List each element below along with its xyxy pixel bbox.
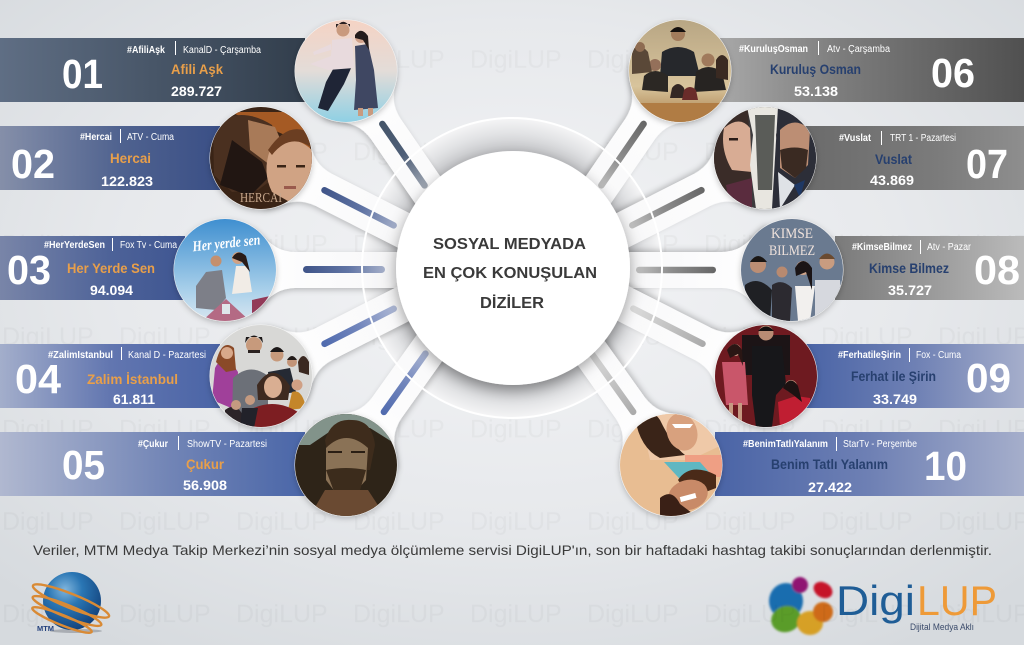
photo: Her Yerde Sen: Her yerde sen <box>191 232 261 255</box>
logo: DigiLUP: Digi <box>836 577 915 624</box>
panel: 05 Çukur: 56.908 <box>183 477 227 493</box>
title: DİZİLER <box>480 294 544 312</box>
photo: Çukur <box>294 414 398 516</box>
title: EN ÇOK KONUŞULAN <box>423 265 597 282</box>
panel: 02 Hercai: 122.823 <box>101 173 153 189</box>
panel: 06 Kuruluş Osman <box>720 38 1024 102</box>
title <box>423 236 597 312</box>
arm 10 <box>525 285 692 470</box>
panel: 06 Kuruluş Osman: 53.138 <box>794 83 838 99</box>
photo: Hercai <box>210 106 312 210</box>
panel: 09 Ferhat ile Şirin: 33.749 <box>873 391 917 407</box>
panel: 01 Afili Aşk <box>0 38 305 102</box>
panel: 09 Ferhat ile Şirin: Fox - Cuma <box>916 350 961 361</box>
photo: Kimse Bilmez <box>740 218 844 322</box>
photo: Hercai: HERCAI <box>240 191 282 206</box>
panel: 05 Çukur: Çukur <box>186 456 225 472</box>
logo: MTM: MTM <box>37 626 54 633</box>
arm 01 <box>324 67 490 253</box>
panel: 05 Çukur: 05 <box>62 442 105 488</box>
hub arms <box>250 67 767 470</box>
panel: 10 Benim Tatlı Yalanım: #BenimTatlıYalanım <box>743 439 828 450</box>
photo: Her Yerde Sen <box>174 218 276 322</box>
panel: 08 Kimse Bilmez: Atv - Pazar <box>927 242 972 253</box>
panel: 03 Her Yerde Sen: Fox Tv - Cuma <box>120 240 177 251</box>
panel: 10 Benim Tatlı Yalanım: StarTv - Perşembe <box>843 439 917 450</box>
arm 02 <box>263 130 450 283</box>
panel: 01 Afili Aşk: #AfiliAşk <box>127 45 165 56</box>
panel: 02 Hercai <box>0 126 220 190</box>
panel: 07 Vuslat: 07 <box>966 141 1008 187</box>
logo: DigiLUP: LUP <box>917 577 997 624</box>
photo: Kuruluş Osman <box>628 20 732 123</box>
panel: 07 Vuslat <box>805 126 1024 190</box>
panel: 03 Her Yerde Sen: 03 <box>7 247 51 293</box>
logo: DigiLUP: Dijital Medya Aklı <box>910 622 974 632</box>
outer ring <box>362 118 662 418</box>
panel: 01 Afili Aşk: 289.727 <box>171 83 222 99</box>
panel: 06 Kuruluş Osman: 06 <box>931 50 975 96</box>
panel: 01 Afili Aşk: KanalD - Çarşamba <box>183 45 261 56</box>
photo: Ferhat ile Şirin <box>714 324 818 428</box>
panel: 08 Kimse Bilmez <box>835 236 1024 300</box>
arm 03 <box>250 226 415 314</box>
panel: 01 Afili Aşk: 01 <box>62 51 103 97</box>
title: SOSYAL MEDYADA <box>433 236 586 253</box>
arm 05 <box>325 285 492 470</box>
panel: 07 Vuslat: TRT 1 - Pazartesi <box>890 133 956 144</box>
panel: 10 Benim Tatlı Yalanım: Benim Tatlı Yalanım <box>771 456 888 472</box>
panel: 03 Her Yerde Sen: Her Yerde Sen <box>67 260 155 276</box>
panel: 02 Hercai: Hercai <box>110 150 151 166</box>
photo: Kimse Bilmez: KIMSE <box>771 226 813 242</box>
panel: 03 Her Yerde Sen: 94.094 <box>90 282 133 298</box>
panel: 10 Benim Tatlı Yalanım: 10 <box>924 443 967 489</box>
panel: 04 Zalim İstanbul <box>0 344 220 408</box>
panel: 09 Ferhat ile Şirin: #FerhatileŞirin <box>838 350 901 361</box>
footnote text: Veriler, MTM Medya Takip Merkezi’nin sosyal medya ölçümleme servisi DigiLUP'ın, son bir haftadaki hashtag takibi sonuçlarından derlenmiştir. <box>33 542 992 558</box>
photo: Kimse Bilmez: BILMEZ <box>769 243 815 259</box>
panel: 04 Zalim İstanbul: 04 <box>15 356 61 402</box>
arm 06 <box>536 67 702 253</box>
panel: 05 Çukur: #Çukur <box>138 439 168 450</box>
panel: 05 Çukur: ShowTV - Pazartesi <box>187 439 267 450</box>
panel: 06 Kuruluş Osman: Kuruluş Osman <box>770 61 861 77</box>
photo: Zalim İstanbul <box>210 324 312 428</box>
photo: Afili Aşk <box>294 20 398 122</box>
photo: Vuslat <box>714 106 816 210</box>
panel: 02 Hercai: #Hercai <box>80 132 112 143</box>
arm 08 <box>602 226 767 314</box>
arm 07 <box>576 130 763 283</box>
panel: 08 Kimse Bilmez: Kimse Bilmez <box>869 260 949 276</box>
panel: 02 Hercai: ATV - Cuma <box>127 132 174 143</box>
panel: 08 Kimse Bilmez: 08 <box>974 247 1020 293</box>
panel: 05 Çukur <box>0 432 305 496</box>
panel: 10 Benim Tatlı Yalanım <box>715 432 1024 496</box>
panel: 09 Ferhat ile Şirin <box>805 344 1024 408</box>
panel: 03 Her Yerde Sen <box>0 236 185 300</box>
central disc <box>362 118 662 418</box>
panel: 02 Hercai: 02 <box>11 141 55 187</box>
panel: 10 Benim Tatlı Yalanım: 27.422 <box>808 479 852 495</box>
panel: 06 Kuruluş Osman: #KuruluşOsman <box>739 44 808 55</box>
panel: 04 Zalim İstanbul: Zalim İstanbul <box>87 371 178 387</box>
panel: 07 Vuslat: Vuslat <box>875 151 912 167</box>
arm 04 <box>263 251 450 404</box>
panel: 07 Vuslat: 43.869 <box>870 172 914 188</box>
panel: 09 Ferhat ile Şirin: Ferhat ile Şirin <box>851 368 936 384</box>
panel: 04 Zalim İstanbul: Kanal D - Pazartesi <box>128 350 206 361</box>
logo: DigiLUP <box>767 577 997 636</box>
panel: 01 Afili Aşk: Afili Aşk <box>171 61 223 77</box>
arm 09 <box>577 251 764 404</box>
panel: 07 Vuslat: #Vuslat <box>839 133 872 144</box>
panel: 04 Zalim İstanbul: 61.811 <box>113 391 155 407</box>
panel: 03 Her Yerde Sen: #HerYerdeSen <box>44 240 105 251</box>
panel: 09 Ferhat ile Şirin: 09 <box>966 355 1011 401</box>
panel: 06 Kuruluş Osman: Atv - Çarşamba <box>827 44 890 55</box>
central circle with title <box>396 151 630 385</box>
panel: 08 Kimse Bilmez: 35.727 <box>888 282 932 298</box>
photo: Benim Tatlı Yalanım <box>620 409 722 516</box>
panel: 08 Kimse Bilmez: #KimseBilmez <box>852 242 912 253</box>
panel: 04 Zalim İstanbul: #ZalimIstanbul <box>48 350 113 361</box>
logo: MTM <box>30 572 112 637</box>
